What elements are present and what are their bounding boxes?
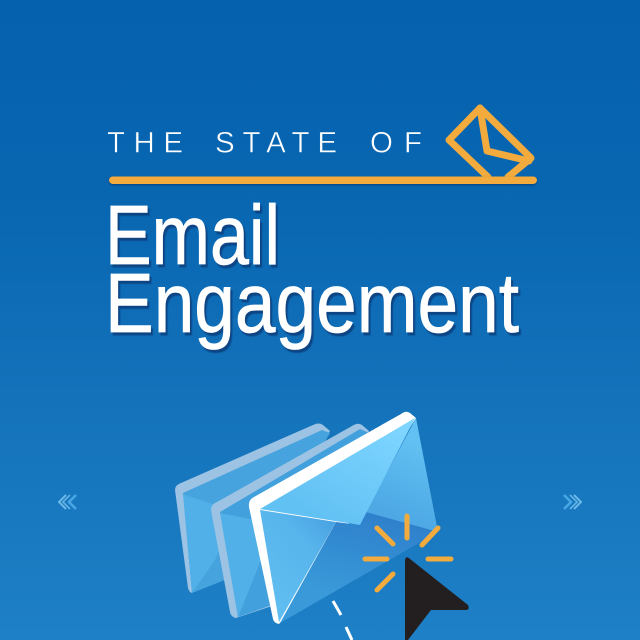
title: email engagement [105,188,519,350]
envelope white edge [249,412,416,624]
heading: the state of: OF [370,126,422,160]
front envelope [249,412,438,624]
envelope top flap [260,418,415,525]
icon: cursor arrow [405,557,469,640]
envelope dark inner pocket [280,512,438,623]
envelope right panel [366,418,438,532]
icon: left double chevron [59,495,76,509]
click sparks [365,516,451,590]
back envelope [175,424,330,593]
heading: the state of: THE [107,126,183,160]
heading: the state of: STATE [215,126,337,160]
middle envelope [211,424,369,618]
title: email engagement: Email [105,188,280,282]
heading: the state of [107,126,422,160]
envelope left panel [260,510,336,622]
icon: tilted envelope on rule [449,108,531,177]
divider rule [109,176,537,184]
dashed click path [333,601,352,640]
icon: right double chevron [564,495,581,509]
title: email engagement: Engagement [105,256,519,350]
